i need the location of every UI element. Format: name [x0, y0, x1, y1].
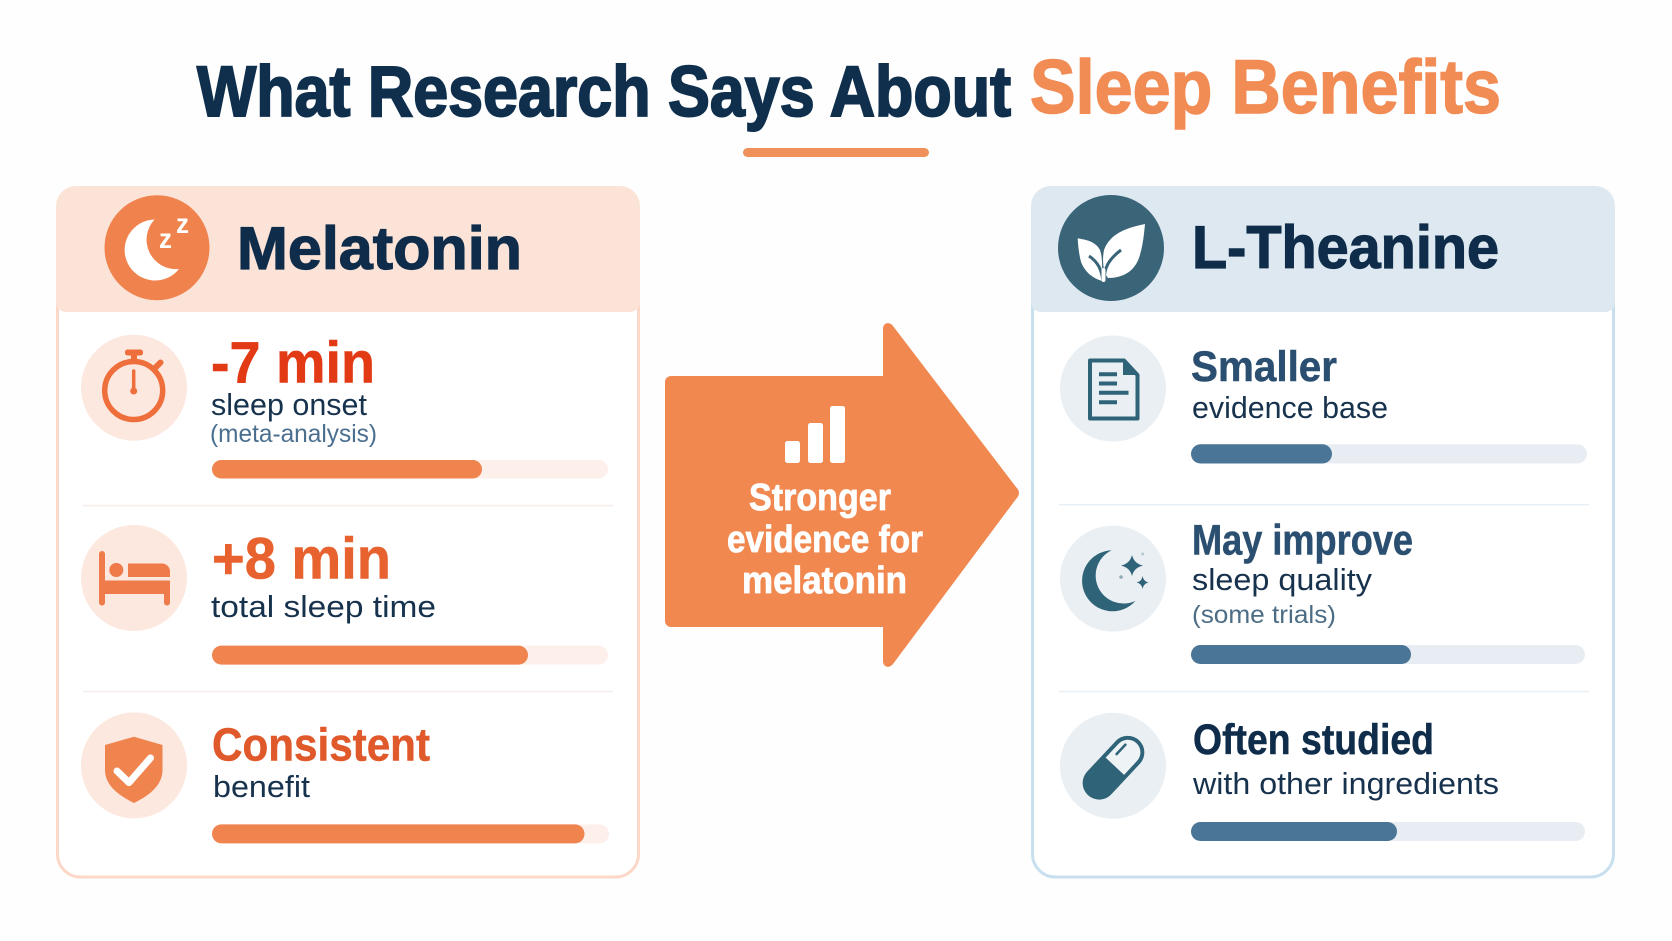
row: sleep onset: [81, 331, 608, 478]
stat: -7 min: -7 min: [211, 331, 375, 396]
title: [197, 45, 1501, 132]
icon: bar chart: [785, 406, 845, 463]
progress bar: [1191, 444, 1587, 464]
title: Sleep Benefits: [1030, 45, 1501, 130]
melatonin header: [56, 186, 640, 312]
icon: document: [1060, 336, 1166, 442]
icon: moon and stars: [1060, 526, 1166, 632]
arrow: stronger evidence: [665, 323, 1019, 667]
heading: l-theanine: L-Theanine: [1192, 214, 1499, 281]
progress bar: [1191, 822, 1585, 841]
row: often studied: [1060, 713, 1585, 841]
label: with other ingredients: with other ingredients: [1192, 766, 1499, 801]
panel: l-theanine: [1031, 186, 1615, 877]
title underline: [743, 148, 929, 157]
note: some trials: (some trials): [1192, 601, 1336, 629]
icon: leaves: [1058, 195, 1164, 301]
row: consistent benefit: [81, 712, 609, 843]
arrow text: evidence for: [727, 519, 923, 561]
row: smaller evidence base: [1060, 336, 1587, 464]
stat: +8 min: +8 min: [212, 527, 391, 592]
stat: smaller: Smaller: [1191, 343, 1337, 391]
label: benefit: benefit: [213, 769, 310, 804]
icon: capsule: [1060, 713, 1166, 819]
l-theanine header: [1031, 186, 1615, 312]
icon: shield check: [81, 712, 187, 818]
title: What Research Says About: [197, 53, 1011, 132]
label: sleep quality: sleep quality: [1192, 562, 1373, 597]
row: total sleep time: [81, 525, 608, 665]
label: sleep onset: sleep onset: [211, 387, 367, 422]
icon: moon with zzz: z: [159, 223, 172, 254]
stat: consistent: Consistent: [212, 718, 430, 770]
arrow text: Stronger: [749, 477, 891, 519]
progress bar: [212, 824, 609, 843]
icon: moon with zzz: z: [176, 208, 189, 239]
icon: moon with zzz: [104, 195, 210, 300]
label: total sleep time: total sleep time: [211, 589, 436, 624]
progress bar: [1191, 645, 1585, 664]
panel: melatonin: [56, 186, 640, 877]
row: may improve sleep quality: [1060, 516, 1585, 664]
label: evidence base: evidence base: [1192, 390, 1388, 425]
icon: stopwatch: [81, 335, 187, 441]
stat: may improve: May improve: [1192, 516, 1413, 564]
icon: bed: [81, 525, 187, 631]
progress bar: [212, 646, 608, 665]
arrow text: [727, 477, 923, 602]
arrow text: melatonin: [742, 560, 907, 602]
note: meta-analysis: (meta-analysis): [210, 420, 377, 448]
heading: melatonin: Melatonin: [237, 215, 522, 282]
stat: often studied: Often studied: [1193, 716, 1434, 764]
progress bar: [212, 460, 608, 478]
